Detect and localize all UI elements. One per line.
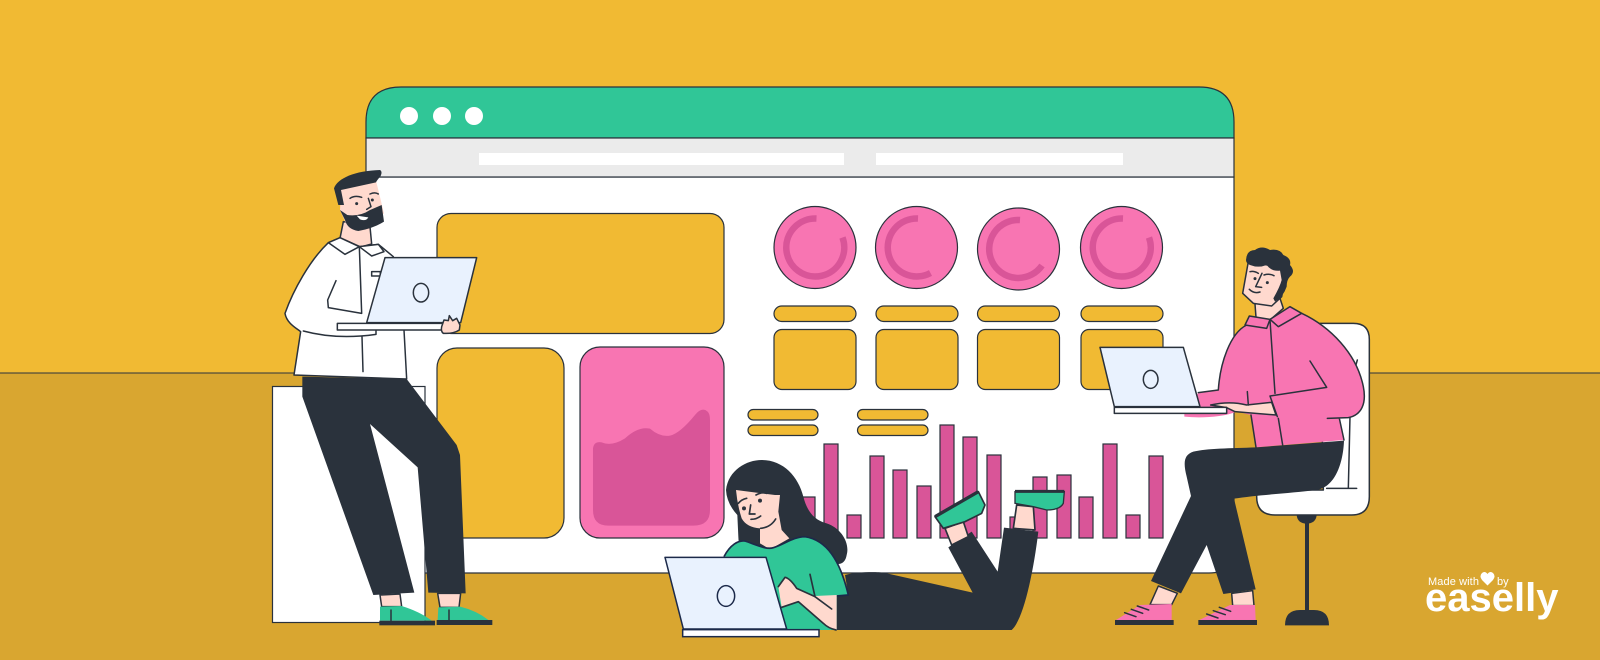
ankles <box>380 593 461 607</box>
logo: made with love by easelly <box>1425 572 1559 620</box>
facial features <box>738 493 776 528</box>
wordmark: easelly <box>1425 576 1559 620</box>
stat label pills <box>774 306 1163 322</box>
left shoe <box>379 606 435 625</box>
arm outline <box>778 577 836 630</box>
shirt outline <box>1198 313 1364 447</box>
arm fill <box>778 577 837 630</box>
background floor <box>0 373 1600 660</box>
hair <box>1246 247 1293 302</box>
laptop <box>665 557 819 637</box>
mouth <box>357 216 368 220</box>
progress circles row <box>774 206 1162 290</box>
address field left <box>479 153 844 165</box>
laptop <box>337 258 477 330</box>
pants <box>302 377 466 595</box>
bar chart <box>801 425 1163 538</box>
window body <box>366 177 1234 573</box>
raised shoe 2 <box>1015 492 1064 510</box>
neck <box>1255 298 1283 320</box>
heart icon <box>1480 572 1494 586</box>
face <box>340 181 384 230</box>
collar <box>1245 307 1302 328</box>
legend pills <box>748 410 928 436</box>
horizon line <box>0 372 1600 374</box>
title bar <box>366 87 1234 138</box>
left shoe <box>1115 604 1174 625</box>
raised shoe 1 edge <box>935 492 978 517</box>
right shoe <box>437 607 492 625</box>
shirt fill <box>724 537 848 630</box>
hand on keyboard <box>1211 402 1276 415</box>
address field right <box>876 153 1123 165</box>
hand <box>441 316 460 333</box>
area chart <box>593 410 710 526</box>
face and neck <box>736 490 789 549</box>
hair <box>726 460 847 564</box>
white box the man leans on <box>272 386 425 622</box>
panel: tall yellow card <box>437 348 564 538</box>
pants <box>1151 441 1344 594</box>
person: seated man on chair <box>1100 247 1369 625</box>
tagline text: Made with <box>1428 576 1479 588</box>
raised shoe 2 edge <box>1015 487 1064 496</box>
shirt <box>1184 307 1364 447</box>
collar <box>328 238 384 256</box>
laptop <box>1100 347 1227 413</box>
facial features <box>1249 271 1274 293</box>
progress circle 2 <box>876 206 958 288</box>
shirt detail lines <box>303 247 376 372</box>
right shoe <box>1198 605 1257 625</box>
face <box>1243 262 1287 306</box>
stat cards <box>774 330 1163 390</box>
progress circle 1 <box>774 206 856 288</box>
wrist line <box>1247 392 1248 405</box>
pants <box>835 528 1038 630</box>
window control dots <box>400 107 483 125</box>
progress circle 4 <box>1080 206 1162 288</box>
progress circle 3 <box>978 208 1060 290</box>
shirt outline <box>724 537 848 596</box>
facial features <box>350 193 378 209</box>
browser window <box>366 87 1234 573</box>
ankles <box>945 505 1035 545</box>
background wall <box>0 0 1600 373</box>
person: standing man with beard <box>285 170 492 625</box>
person: woman lying on floor <box>665 460 1064 637</box>
raised shoe 1 <box>935 492 985 528</box>
panel: large yellow card <box>437 214 724 334</box>
sleeve lines <box>810 574 832 609</box>
shirt lines <box>1270 320 1327 445</box>
panel: pink area chart card <box>580 347 724 538</box>
pocket tag <box>372 272 380 276</box>
ankles <box>1150 586 1254 606</box>
shirt <box>285 238 407 379</box>
hair <box>334 170 382 205</box>
chair <box>1257 323 1369 625</box>
tagline by: by <box>1497 576 1509 588</box>
beard <box>340 205 384 231</box>
address bar strip <box>366 138 1234 177</box>
neck <box>340 222 372 247</box>
